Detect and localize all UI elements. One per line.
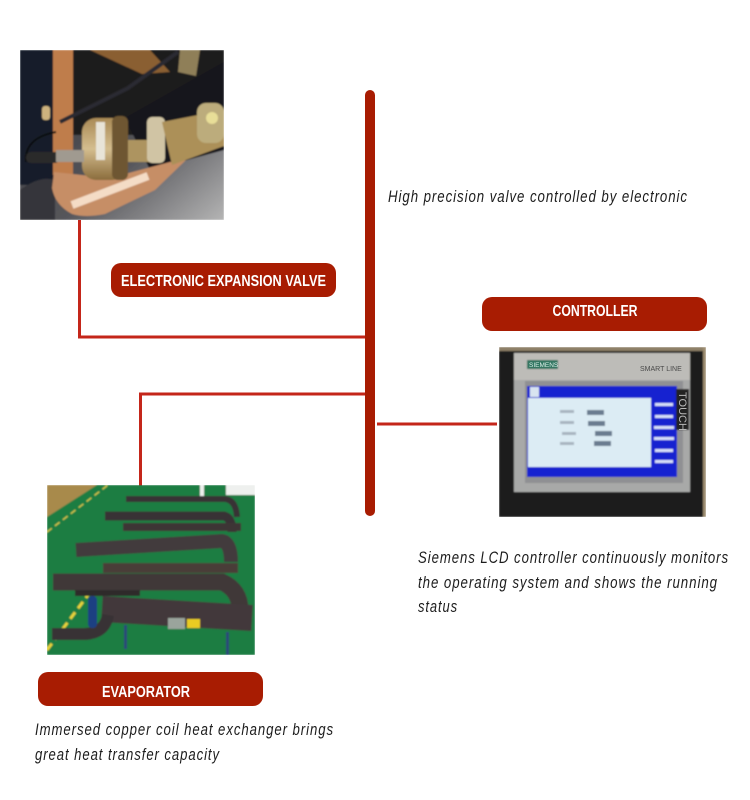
photo: electronic expansion valve (20, 50, 224, 220)
central vertical bar (365, 90, 375, 516)
label: evaporator: EVAPORATOR (102, 684, 190, 701)
connector: evaporator to central bar (140, 394, 366, 486)
photo: Siemens touch controller (499, 347, 706, 517)
text: evaporator description: great heat transfer capacity (35, 745, 220, 764)
label: controller (482, 297, 707, 331)
text: device brand: SIEMENS (529, 362, 559, 369)
label: electronic expansion valve: ELECTRONIC EXPANSION VALVE (121, 273, 326, 290)
label: evaporator (38, 672, 263, 706)
label: electronic expansion valve (111, 263, 336, 297)
connector: central bar to controller (377, 422, 497, 426)
text: evaporator description: Immersed copper coil heat exchanger brings (35, 720, 334, 739)
label: controller: CONTROLLER (552, 303, 638, 320)
text: evaporator description (35, 720, 334, 764)
text: device touch mark: TOUCH (676, 392, 688, 431)
connector: valve to central bar (80, 220, 366, 337)
text: controller description (418, 548, 729, 616)
text: device model: SMART LINE (640, 366, 682, 373)
text: controller description: status (418, 597, 458, 616)
photo: evaporators (47, 485, 255, 655)
